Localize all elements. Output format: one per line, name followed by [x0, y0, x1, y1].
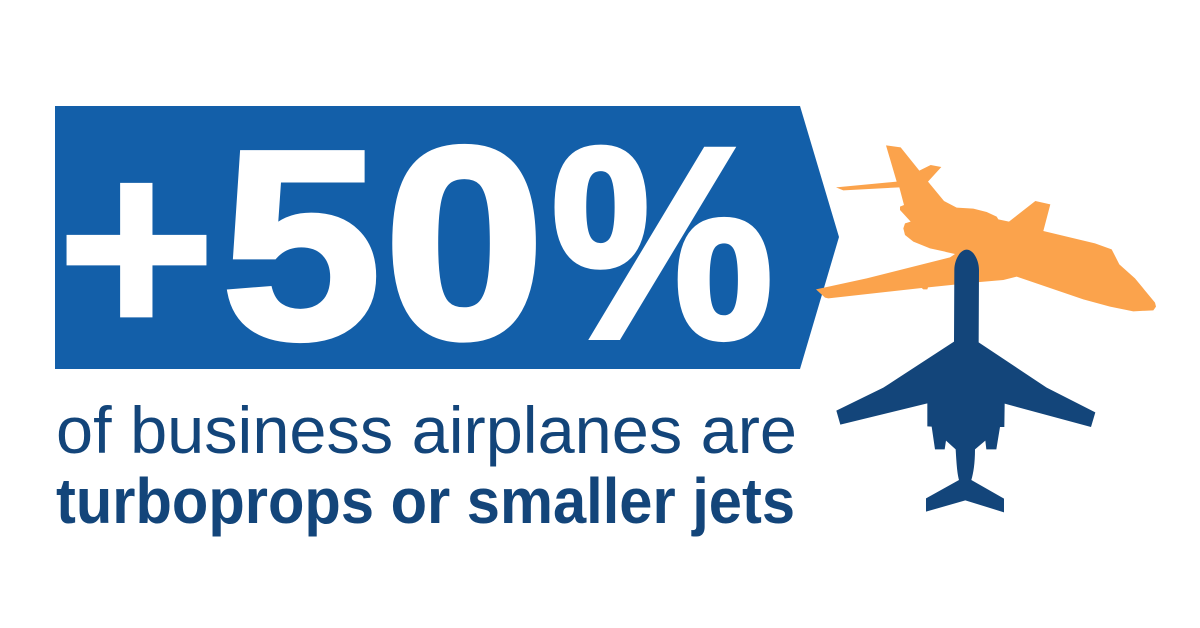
heading: +50%: [56, 91, 774, 396]
digit 5: 5: [221, 95, 382, 396]
digit 0: 0: [384, 92, 545, 395]
banner: blue arrow tag: [55, 106, 839, 369]
text: first line: of business airplanes are: [56, 393, 797, 467]
plus sign: +: [56, 100, 217, 393]
icon: orange side-view jet: [816, 145, 1156, 311]
percent sign: %: [551, 91, 774, 395]
text: second line bold: turboprops or smaller jets: [56, 465, 795, 537]
icon: navy top-view jet: [836, 250, 1095, 512]
